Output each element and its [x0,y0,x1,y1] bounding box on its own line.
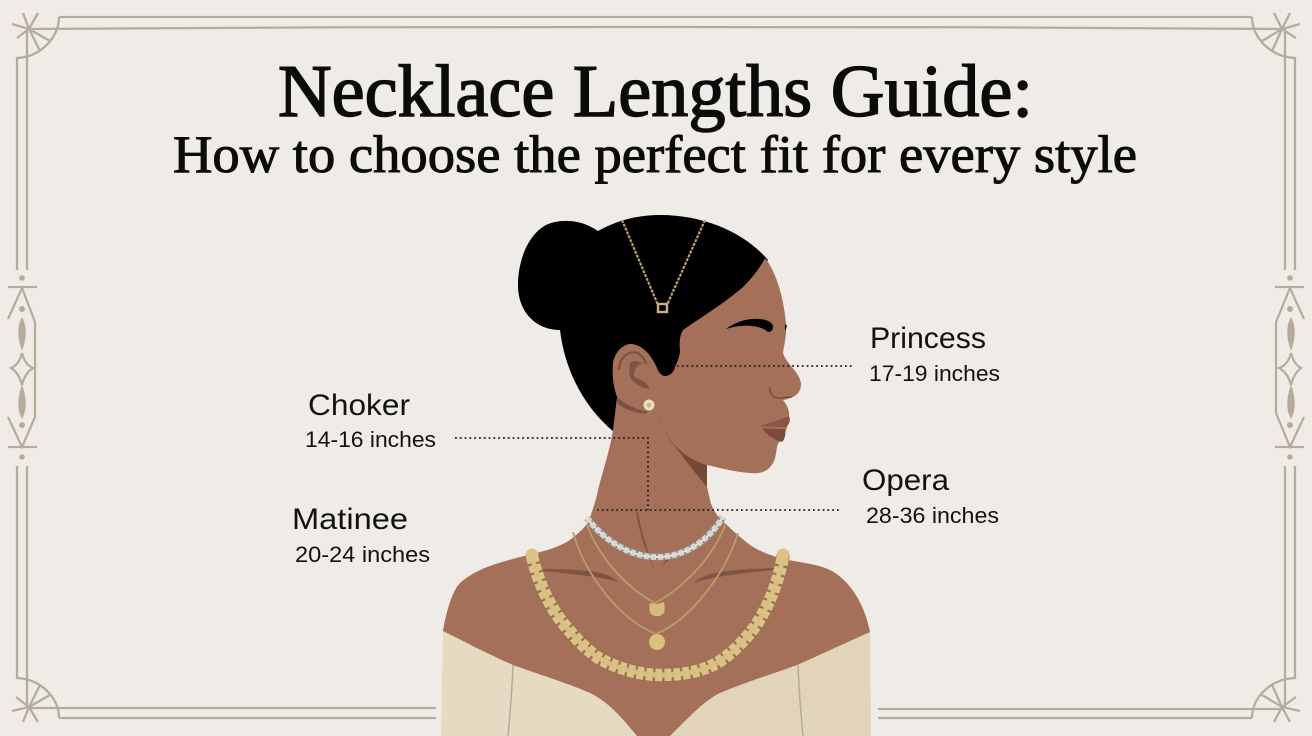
necklace: large gold curb chain [526,548,790,675]
hair and bun [518,215,768,432]
corner ornament: bottom left [12,466,436,722]
ear [617,352,650,414]
side ornament: right [1275,275,1304,460]
eyebrow [726,319,773,332]
title [173,51,1137,184]
label: Choker: Choker [308,389,410,422]
jaw and neck shadow [658,413,707,487]
label: Matinee: Matinee [292,503,408,536]
label: Princess [869,322,1000,386]
lips [759,416,790,442]
necklace: princess chain and pendant [587,525,725,616]
necklace: silver choker curb chain [587,517,723,557]
label: Princess: 17-19 inches [869,361,1000,386]
nostril [770,387,792,398]
heading line 2: How to choose the perfect fit for every style [173,126,1137,184]
label: Choker [305,389,436,452]
corner ornament: top left [12,13,660,270]
label: Matinee [292,503,430,567]
dress [441,628,871,736]
necklace: opera chain and coin pendant [573,532,738,650]
corner ornament: top right [660,13,1300,270]
label: Opera [862,464,999,528]
corner ornament: bottom right [878,466,1300,722]
label: Choker: 14-16 inches [305,427,436,452]
heading line 1: Necklace Lengths Guide: [278,51,1033,133]
necklace: stray chain with square pendant [622,220,705,312]
label: Princess: Princess [870,322,986,355]
earring [644,400,654,410]
neck creases and collarbones [543,512,774,583]
dotted leader lines [455,366,852,510]
side ornament: left [8,275,37,460]
figure: woman in profile [441,215,871,736]
label: Opera: Opera [862,464,949,497]
label: Opera: 28-36 inches [866,503,999,528]
skin: face, neck and shoulders [443,258,870,736]
label: Matinee: 20-24 inches [295,542,430,567]
